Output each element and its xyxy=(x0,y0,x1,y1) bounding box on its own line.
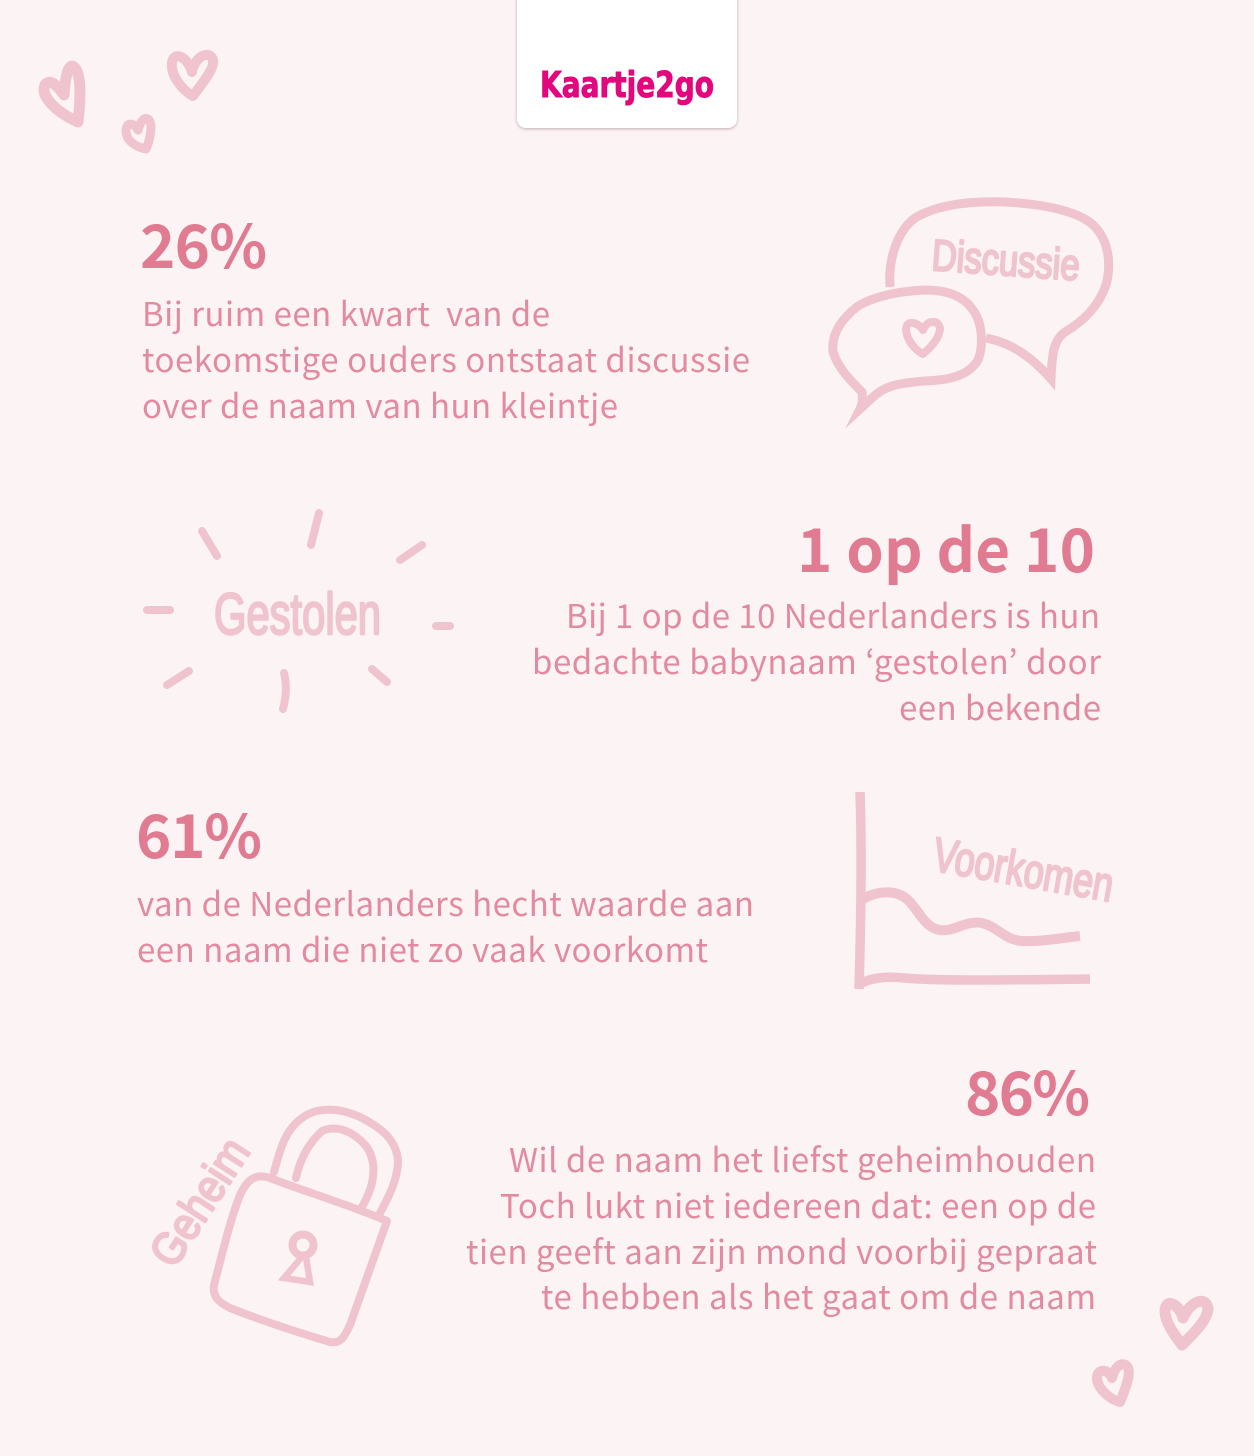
icon: hearts top left xyxy=(44,55,213,149)
text block xyxy=(137,878,754,972)
icon: heart in bubble xyxy=(906,322,940,354)
icon: speech bubbles Discussie xyxy=(833,202,1109,409)
text block: bedachte babynaam ‘gestolen’ door xyxy=(532,636,1101,684)
icon: padlock Geheim xyxy=(139,1110,398,1342)
text block: een naam die niet zo vaak voorkomt xyxy=(137,924,708,972)
text block: Bij ruim een kwart van de xyxy=(142,288,550,336)
icon: hearts bottom right xyxy=(1097,1301,1208,1402)
text block: een bekende xyxy=(899,682,1101,730)
text block xyxy=(142,288,750,428)
logo card xyxy=(517,0,737,128)
text block: Bij 1 op de 10 Nederlanders is hun xyxy=(566,590,1100,638)
text block xyxy=(466,1134,1097,1319)
label: Gestolen: Gestolen xyxy=(214,582,381,647)
text block: van de Nederlanders hecht waarde aan xyxy=(137,878,754,926)
chart icon: Voorkomen xyxy=(859,792,1118,989)
heading: 61% xyxy=(136,789,262,876)
icon: keyhole xyxy=(284,1234,314,1282)
text block: tien geeft aan zijn mond voorbij gepraat xyxy=(466,1226,1097,1274)
text block xyxy=(532,590,1101,730)
stat: 1 op de 10 xyxy=(532,503,1101,730)
label: Voorkomen: Voorkomen xyxy=(929,829,1118,912)
label: Geheim: Geheim xyxy=(139,1128,260,1275)
heading: 26% xyxy=(140,199,267,286)
icon: rays Gestolen xyxy=(147,513,450,709)
text block: te hebben als het gaat om de naam xyxy=(541,1271,1096,1319)
text block: toekomstige ouders ontstaat discussie xyxy=(142,334,750,382)
text block: over de naam van hun kleintje xyxy=(142,380,618,428)
stat: 26 percent xyxy=(140,199,750,428)
heading: 1 op de 10 xyxy=(797,503,1095,590)
text block: Wil de naam het liefst geheimhouden xyxy=(509,1134,1096,1182)
logo wordmark: Kaartje2go xyxy=(540,65,714,106)
stat: 61 percent xyxy=(136,789,754,972)
label: Discussie: Discussie xyxy=(930,231,1081,290)
text block: Toch lukt niet iedereen dat: een op de xyxy=(500,1180,1096,1228)
stat: 86 percent xyxy=(466,1046,1097,1319)
heading: 86% xyxy=(965,1046,1090,1133)
